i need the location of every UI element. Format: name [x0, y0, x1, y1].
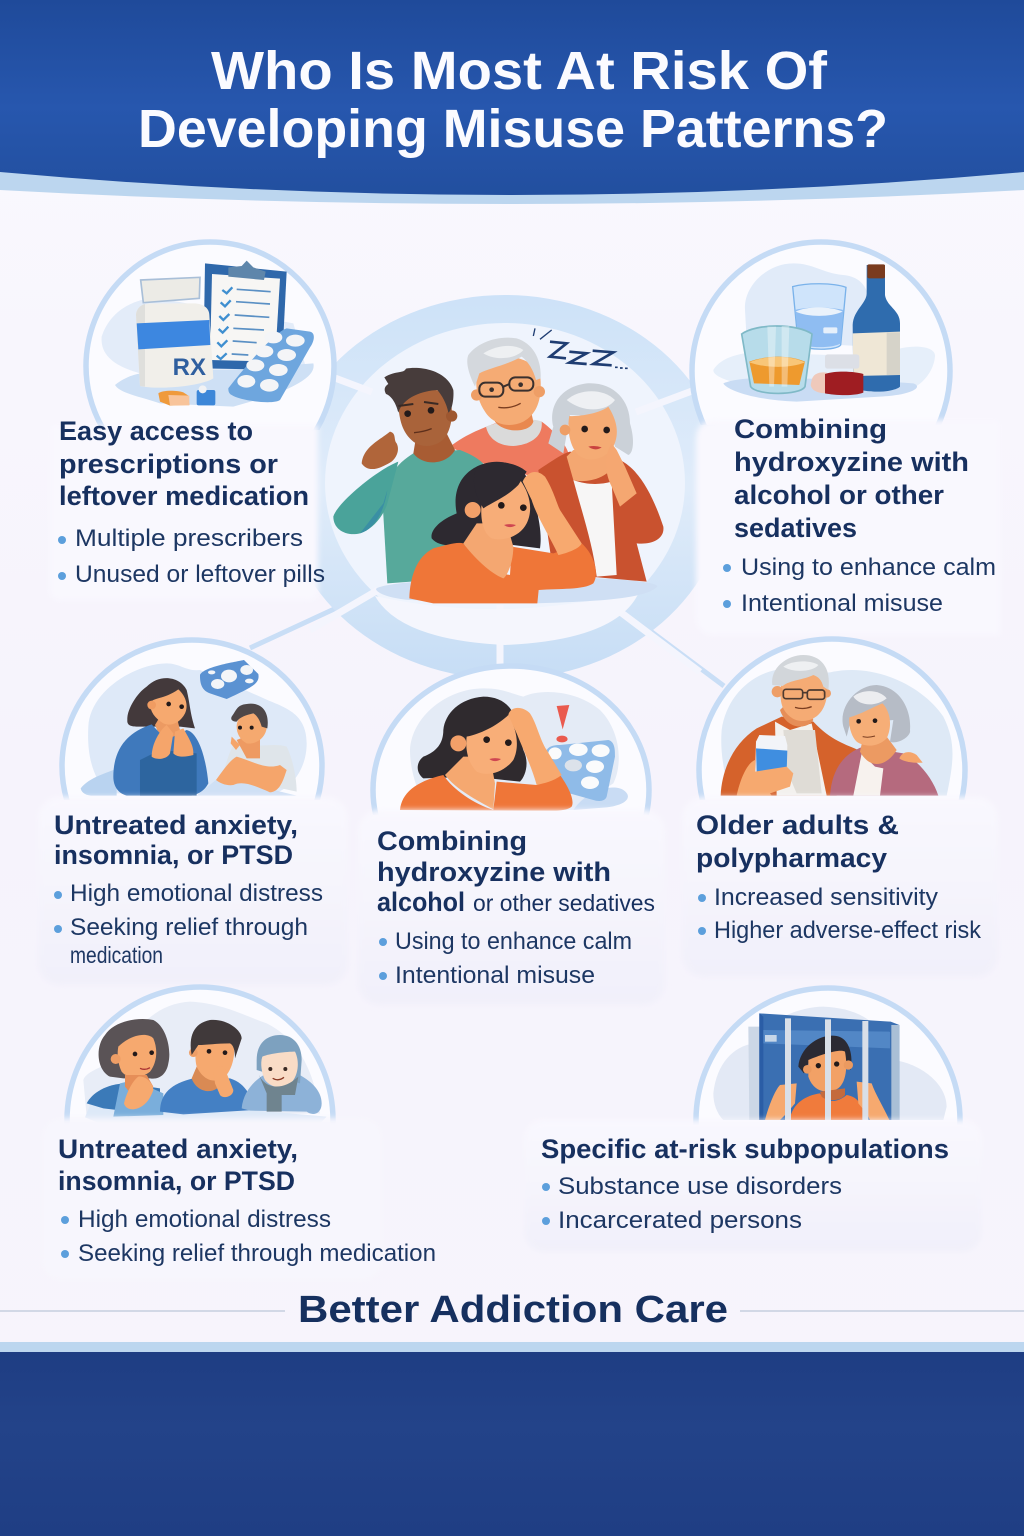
heading: Specific at-risk subpopulations [541, 1134, 949, 1164]
text card [42, 1118, 382, 1280]
bullet list [58, 525, 325, 588]
ring frame [64, 984, 336, 1121]
heading: Easy access to [59, 416, 253, 446]
ring frame [59, 637, 325, 800]
bullet list [61, 1206, 436, 1267]
panel: specific at-risk subpopulations [542, 985, 963, 1233]
young man in teal [333, 368, 487, 583]
icon: RX bottle, clipboard and blister pack [102, 261, 314, 407]
heading [59, 416, 309, 511]
bullet list [542, 1173, 842, 1234]
heading: leftover medication [59, 481, 309, 511]
title: Developing Misuse Patterns? [138, 99, 888, 159]
heading: hydroxyzine with [377, 857, 611, 887]
older woman [538, 383, 663, 582]
bullet list: Substance use disorders [558, 1173, 842, 1200]
bullet list: Intentional misuse [395, 962, 595, 989]
heading: alcohol or other [734, 480, 944, 510]
footer divider and brand name: Better Addiction Care [298, 1289, 728, 1331]
bullet list: Seeking relief through [70, 914, 308, 941]
heading [377, 826, 655, 917]
text card [50, 425, 318, 600]
panel: combining hydroxyzine, centre [370, 664, 654, 983]
central illustration: four worried people [333, 328, 663, 603]
ring frame [689, 239, 953, 425]
bullet list: Multiple prescribers [75, 525, 303, 552]
bullet list: Intentional misuse [741, 590, 943, 617]
ring frame [693, 985, 963, 1123]
icon: woman with blister pack and warning [400, 688, 628, 811]
bullet list: Unused or leftover pills [75, 561, 325, 588]
bullet list: Increased sensitivity [714, 884, 938, 911]
bullet list: Using to enhance calm [741, 554, 996, 581]
bullet list [54, 880, 323, 968]
bullet list: High emotional distress [78, 1206, 331, 1233]
heading [696, 810, 899, 873]
text card [38, 797, 348, 985]
panel: untreated anxiety, lower left [42, 987, 436, 1280]
ring frame [696, 636, 968, 800]
text card [524, 1120, 982, 1252]
heading: sedatives [734, 513, 857, 543]
heading: hydroxyzine with [734, 447, 969, 477]
bullet list: High emotional distress [70, 880, 323, 907]
heading: Untreated anxiety, [54, 810, 298, 840]
title: Who Is Most At Risk Of [211, 41, 828, 101]
bullet list: Using to enhance calm [395, 928, 632, 955]
heading: or other sedatives [473, 890, 655, 916]
title [138, 41, 888, 159]
heading [58, 1134, 298, 1196]
panel: older adults and polypharmacy [696, 636, 981, 943]
text card [682, 797, 998, 977]
heading: polypharmacy [696, 843, 887, 873]
bullet list: Higher adverse-effect risk [714, 917, 982, 944]
heading: insomnia, or PTSD [54, 840, 293, 870]
ground shadow [376, 577, 657, 603]
heading: Untreated anxiety, [58, 1134, 298, 1164]
icon: worried woman and man with pills [81, 660, 307, 796]
panel: easy access to prescriptions [50, 242, 334, 600]
icon: incarcerated person behind bars [713, 1007, 947, 1120]
heading: Older adults & [696, 810, 899, 840]
ring frame [83, 239, 337, 430]
text card [696, 420, 1000, 635]
panel: untreated anxiety, middle left [54, 637, 325, 963]
sleep symbol [533, 328, 628, 368]
header banner [0, 0, 1024, 204]
heading: alcohol [377, 887, 465, 917]
bullet list: Incarcerated persons [558, 1207, 802, 1234]
heading: Combining [734, 414, 887, 444]
heading [734, 414, 969, 543]
young woman in front [409, 462, 596, 603]
heading: insomnia, or PTSD [58, 1166, 295, 1196]
icon: three worried people [83, 1002, 327, 1123]
bullet list: medication [70, 942, 163, 968]
icon: older couple with medication bottle [721, 655, 952, 796]
bottom band [0, 1342, 1024, 1536]
icon: RX bottle, clipboard and blister pack: RX [173, 354, 206, 381]
ring frame [370, 664, 652, 814]
bullet list [723, 554, 996, 617]
bullet list: Seeking relief through medication [78, 1240, 436, 1267]
heading [54, 810, 298, 870]
heading: Combining [377, 826, 527, 856]
text card [358, 810, 665, 1005]
older man [450, 338, 568, 477]
bullet list [698, 884, 982, 944]
heading: prescriptions or [59, 449, 279, 479]
icon: glasses, bottle and pills [713, 263, 935, 402]
panel: combining hydroxyzine, top right [692, 242, 1000, 635]
central hub: circular backdrop with connectors [250, 295, 727, 686]
bullet list [379, 928, 632, 989]
